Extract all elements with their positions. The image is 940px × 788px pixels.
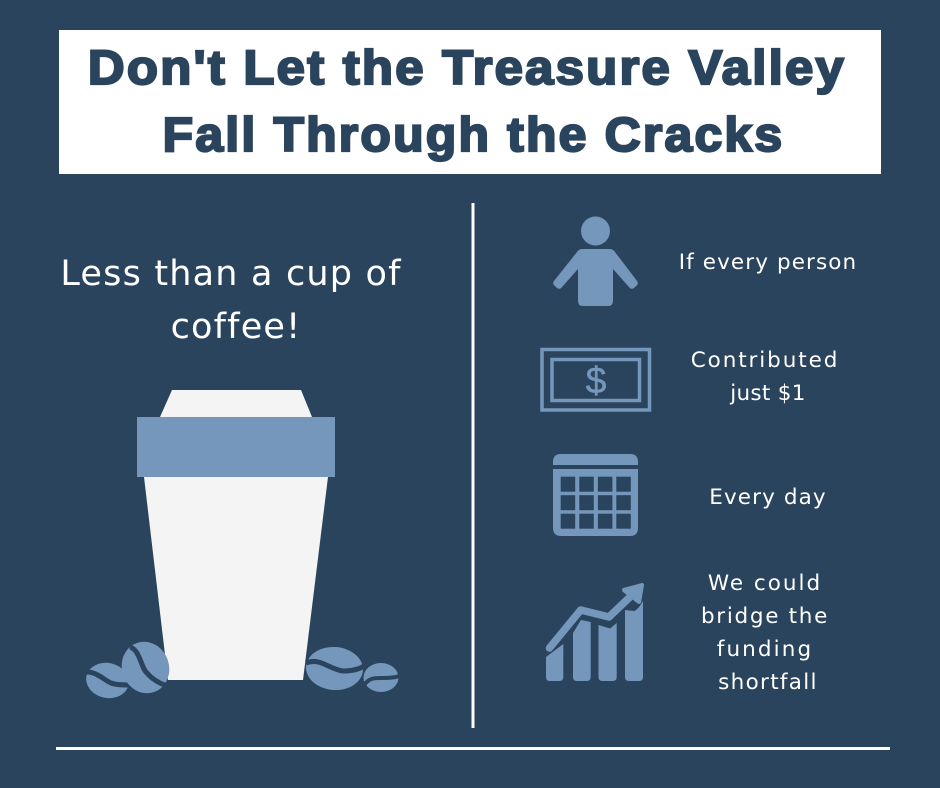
- icon: dollar bill: [542, 350, 650, 410]
- bean 1: [83, 659, 132, 702]
- bean 3: [305, 645, 364, 692]
- title line 1: Don't Let the Treasure Valley: [88, 42, 846, 95]
- icon: growth chart: [546, 583, 644, 681]
- bean 2: [115, 635, 176, 700]
- text: we could bridge the funding shortfall: funding: [717, 637, 813, 662]
- title line 2: Fall Through the Cracks: [163, 109, 784, 162]
- vertical divider: [472, 203, 474, 728]
- text: we could bridge the funding shortfall: bridge the: [701, 604, 829, 629]
- text: if every person: If every person: [679, 250, 857, 275]
- text: contributed just $1: [691, 348, 839, 406]
- cup sleeve: [137, 417, 335, 477]
- cup lid top: [160, 390, 312, 417]
- heading: less than a cup of coffee: coffee!: [171, 307, 301, 347]
- text: every day: Every day: [709, 485, 827, 510]
- icon: person: [553, 216, 638, 306]
- text: we could bridge the funding shortfall: [701, 571, 829, 695]
- bean 4: [364, 663, 399, 692]
- bottom rule: [56, 747, 890, 750]
- text: contributed just $1: just $1: [730, 381, 806, 406]
- heading: less than a cup of coffee: Less than a cup of: [60, 254, 402, 294]
- text: contributed just $1: Contributed: [691, 348, 839, 373]
- icon: calendar: [553, 454, 638, 536]
- heading: less than a cup of coffee: [60, 254, 402, 347]
- cup body: [144, 477, 328, 680]
- title banner: [59, 30, 881, 174]
- icon: dollar bill: $: [586, 360, 606, 401]
- text: we could bridge the funding shortfall: shortfall: [718, 670, 818, 695]
- text: we could bridge the funding shortfall: We could: [708, 571, 822, 596]
